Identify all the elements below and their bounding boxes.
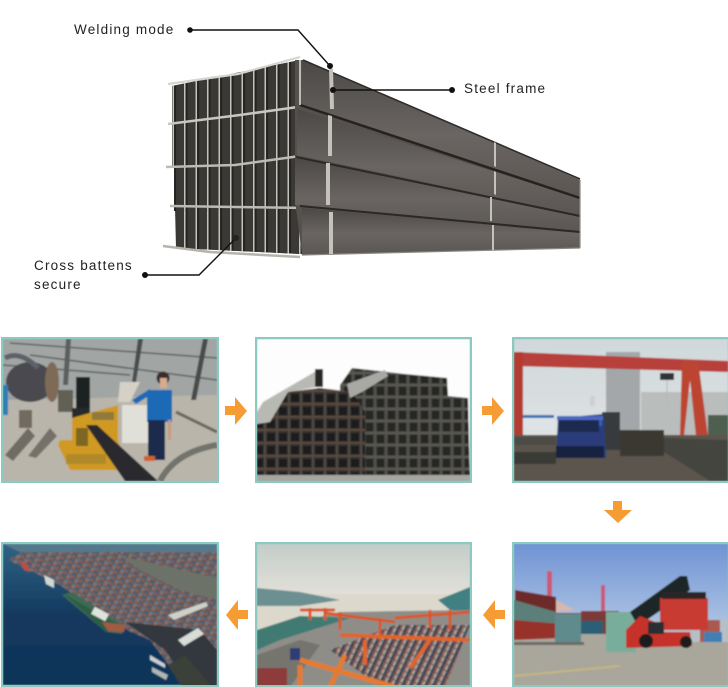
callout: cross battens secure <box>34 235 239 292</box>
photo: bending machine in workshop <box>1 337 219 483</box>
callout: cross battens secure: secure <box>34 277 82 292</box>
arrow: step 2 to 3 <box>482 397 504 425</box>
callout: cross battens secure: Cross battens <box>34 258 133 273</box>
arrow: step 5 to 6 <box>226 600 248 630</box>
callout: steel frame: Steel frame <box>464 81 546 96</box>
photo: port with orange gantry cranes <box>255 542 472 687</box>
photo: stacks of H-beams <box>255 337 472 483</box>
arrow: step 4 to 5 <box>483 600 505 629</box>
callout: welding mode: Welding mode <box>74 22 174 37</box>
callout: welding mode <box>74 22 333 69</box>
photo: aerial view of container port and ship <box>1 542 219 687</box>
beam cross-section ends <box>163 57 310 257</box>
arrow: step 3 to 4 (down) <box>604 501 632 523</box>
packing straps <box>326 68 496 254</box>
photo: truck under gantry crane <box>512 337 728 483</box>
arrow: step 1 to 2 <box>225 397 247 425</box>
beam side faces <box>295 60 580 255</box>
callout: steel frame <box>330 81 546 96</box>
steel beam bundle <box>163 57 580 257</box>
photo: container reach stacker at port <box>512 542 728 687</box>
